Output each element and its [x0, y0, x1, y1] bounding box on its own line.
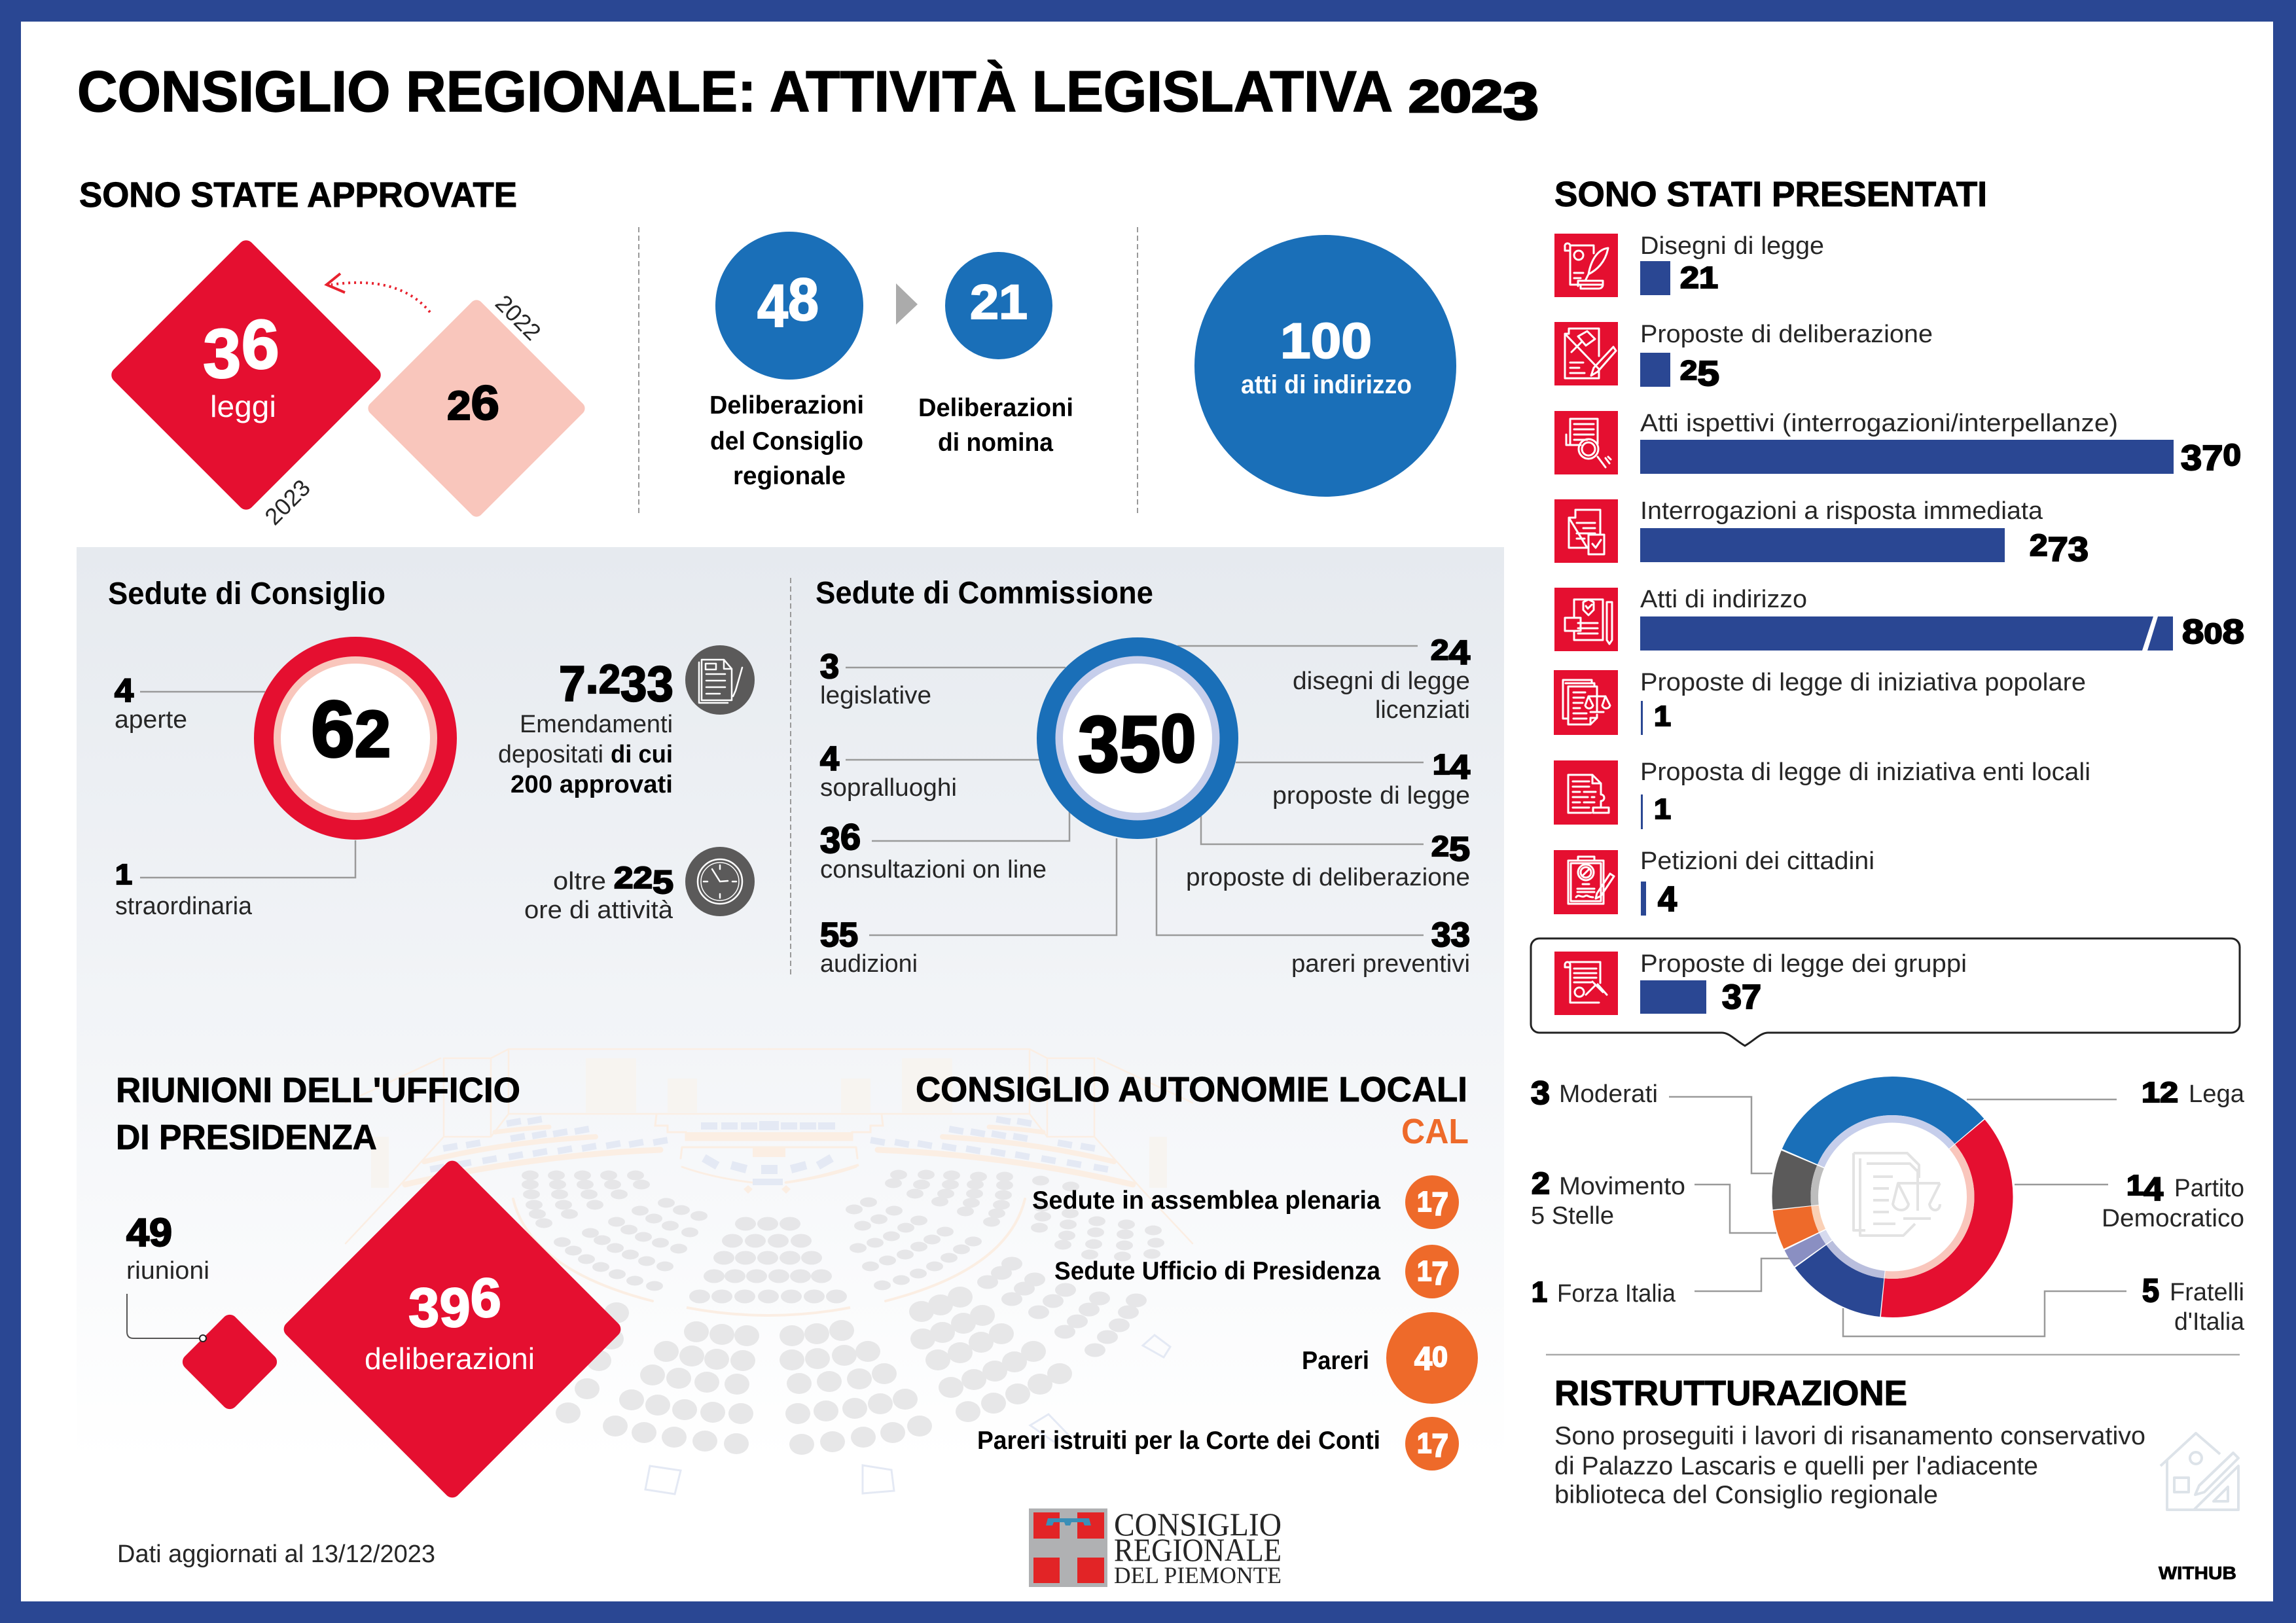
donut chart: proposte dei gruppi [1531, 1054, 2245, 1340]
stat: 4 sopralluoghi: 4 [820, 740, 839, 778]
year label 2023: 2023 [259, 474, 315, 530]
label: moderati: 3 [1531, 1075, 1550, 1111]
icon: scroll with quill [1554, 234, 1618, 297]
stat: 3 legislative: legislative [820, 682, 931, 709]
row: proposte di deliberazione: Proposte di deliberazione [1640, 321, 1933, 348]
row: atti ispettivi: Atti ispettivi (interrogazioni/interpellanze) [1640, 410, 2118, 437]
heading: RIUNIONI DELL'UFFICIO [116, 1071, 520, 1110]
diamond: 396 deliberazioni: deliberazioni [365, 1342, 535, 1376]
divider center [790, 578, 791, 977]
label: partito democratico: Democratico [2102, 1205, 2244, 1232]
panel: sedute di consiglio [108, 577, 755, 924]
label: partito democratico [2102, 1169, 2244, 1232]
stat: 36 consultazioni: consultazioni on line [820, 856, 1047, 883]
stat: 7233 emendamenti: 200 approvati [511, 771, 673, 798]
diamond: leggi 2022 [365, 297, 588, 520]
footnote: Dati aggiornati al 13/12/2023 [117, 1541, 435, 1568]
stat: oltre 225 ore: ore di attività [524, 897, 673, 924]
row: sedute ufficio di presidenza: 7 [1431, 1255, 1448, 1292]
logo: consiglio regionale del piemonte: DEL PIEMONTE [1114, 1562, 1282, 1588]
stat: 55 audizioni [820, 916, 918, 978]
ring: 62 sedute: 62 [311, 685, 391, 774]
title: 3 [1503, 72, 1539, 130]
stat: 33 pareri preventivi: 33 [1431, 916, 1470, 954]
circle: 48 deliberazioni del consiglio: Deliberazioni [709, 391, 864, 419]
icon: document with magnifier [1554, 411, 1618, 474]
diamond: leggi 2023: 3 [203, 314, 241, 393]
label: fratelli d'italia: 5 [2142, 1272, 2159, 1309]
label: movimento 5 stelle: 5 Stelle [1531, 1202, 1614, 1230]
circle: 21 deliberazioni di nomina: Deliberazioni [918, 394, 1073, 422]
stat: oltre 225 ore [524, 861, 673, 924]
label: movimento 5 stelle [1531, 1166, 1685, 1230]
label: partito democratico: 1 [2126, 1169, 2144, 1202]
stat: 14 proposte di legge: 4 [1450, 749, 1470, 787]
stat: 24 disegni: licenziati [1375, 696, 1470, 724]
stat: 3 legislative: 3 [820, 648, 839, 686]
diamond: leggi 2023: leggi [210, 389, 276, 423]
title: 202 [1408, 71, 1485, 122]
stat: oltre 225 ore: 22 [614, 861, 653, 895]
credit: withub: WITHUB [2159, 1563, 2236, 1583]
circle: 21 deliberazioni di nomina [918, 252, 1073, 457]
stat: 3 legislative [820, 648, 931, 709]
row: proposta enti locali: 1 [1654, 793, 1671, 825]
label: forza italia: 1 [1532, 1276, 1547, 1308]
row: pareri corte dei conti [977, 1417, 1459, 1471]
logo: consiglio regionale del piemonte: REGIONALE [1114, 1531, 1282, 1568]
label: lega: 12 [2142, 1077, 2178, 1109]
label: moderati: Moderati [1559, 1080, 1658, 1108]
ring: 350 sedute [1037, 637, 1238, 839]
icon: document with gavel and pen [1554, 322, 1618, 385]
row: petizioni: 4 [1658, 880, 1677, 919]
heading: sono state approvate: SONO STATE APPROVATE [79, 175, 517, 215]
diamond: leggi 2023 [108, 237, 384, 513]
row: proposta enti locali [1554, 758, 2090, 829]
row: sedute ufficio di presidenza: Sedute Ufficio di Presidenza [1054, 1257, 1380, 1285]
stat: 49 riunioni: 49 [126, 1211, 172, 1255]
row: pareri [1302, 1312, 1478, 1404]
label: fratelli d'italia: Fratelli [2170, 1279, 2244, 1306]
stat: 24 disegni: disegni di legge [1293, 668, 1470, 695]
arrow: grey triangle [896, 283, 918, 325]
diamond: 396 deliberazioni [281, 1158, 624, 1501]
title: CONSIGLIO REGIONALE: ATTIVITÀ LEGISLATIVA [77, 59, 1393, 124]
stat: 36 consultazioni: 3 [820, 819, 840, 861]
ring: 62 sedute [254, 637, 457, 840]
stat: 24 disegni [1293, 634, 1470, 724]
body text: di Palazzo Lascaris e quelli per l'adiacente [1554, 1452, 2038, 1480]
stat: oltre 225 ore: oltre [553, 868, 606, 895]
icon: clipboard with pen [1554, 850, 1618, 914]
divider left [639, 227, 1138, 514]
stat: 49 riunioni: riunioni [126, 1257, 209, 1285]
stat: 25 proposte di deliberazione [1186, 830, 1470, 891]
label: movimento 5 stelle: Movimento [1559, 1173, 1685, 1200]
stat: 14 proposte di legge [1272, 749, 1470, 810]
stat: 7233 emendamenti: 7 [559, 656, 586, 712]
icon: scroll with gavel [1554, 952, 1618, 1015]
row: pareri: 0 [1432, 1341, 1448, 1373]
stat: 7233 emendamenti [498, 649, 673, 798]
logo: consiglio regionale del piemonte: CONSIGLIO [1114, 1506, 1282, 1543]
stat: 25 proposte di deliberazione: 5 [1449, 830, 1470, 868]
stat: 7233 emendamenti: 2 [599, 657, 620, 702]
icon: document with stamp [1554, 760, 1618, 825]
label: fratelli d'italia [2142, 1272, 2245, 1336]
icon: clock in grey circle [685, 847, 755, 916]
arrow: dotted comparison [327, 274, 430, 312]
connector lines [1669, 1097, 2126, 1336]
stat: 25 proposte di deliberazione: 2 [1431, 830, 1449, 863]
stat: 4 sopralluoghi: sopralluoghi [820, 774, 957, 802]
diamond: 396 deliberazioni: 6 [471, 1267, 501, 1329]
circle: 48 deliberazioni del consiglio [709, 232, 864, 490]
callout: proposte di legge dei gruppi [1531, 938, 2240, 1046]
circle: 48 deliberazioni del consiglio: del Consiglio [710, 427, 863, 455]
diamond: small 49 [179, 1311, 280, 1412]
stat: 25 proposte di deliberazione: proposte di deliberazione [1186, 864, 1470, 891]
icon: document in grey circle [685, 645, 755, 715]
stat: 7233 emendamenti: 33 [620, 656, 673, 712]
row: interrogazioni: 73 [2048, 531, 2089, 569]
stat: 7233 emendamenti: depositati [498, 741, 603, 768]
stat: 1 straordinaria: straordinaria [115, 893, 253, 920]
row: proposte iniziativa popolare: 1 [1654, 700, 1671, 732]
row: petizioni [1554, 847, 1874, 919]
stat: 49 riunioni [126, 1211, 209, 1285]
stat: 4 aperte: aperte [115, 706, 187, 734]
row: proposta enti locali: Proposta di legge di iniziativa enti locali [1640, 758, 2090, 786]
stat: 4 aperte [115, 672, 187, 734]
stat: 55 audizioni: audizioni [820, 950, 918, 978]
stat: 1 straordinaria [115, 859, 253, 920]
row: pareri corte dei conti: Pareri istruiti per la Corte dei Conti [977, 1427, 1380, 1455]
row: disegni di legge: 21 [1680, 260, 1718, 294]
panel: riunioni ufficio di presidenza [116, 1071, 624, 1501]
row: sedute in assemblea plenaria: Sedute in assemblea plenaria [1032, 1186, 1380, 1215]
heading [116, 1071, 520, 1157]
row: proposte di deliberazione [1554, 321, 1933, 393]
heading: Sedute di Commissione [816, 576, 1153, 611]
row: atti ispettivi [1554, 410, 2241, 478]
row: interrogazioni [1554, 497, 2089, 569]
label: partito democratico: Partito [2174, 1175, 2244, 1202]
stat: 36 consultazioni [820, 816, 1047, 883]
panel: ristrutturazione [1554, 1374, 2238, 1510]
inner ring segments [1782, 1087, 2003, 1307]
stat: 1 straordinaria: 1 [115, 859, 132, 891]
row: sedute in assemblea plenaria: 7 [1431, 1186, 1448, 1222]
row: interrogazioni: 2 [2030, 528, 2048, 562]
logo: consiglio regionale del piemonte [1029, 1506, 1282, 1588]
row: disegni di legge: Disegni di legge [1640, 232, 1824, 260]
connector lines [140, 692, 355, 878]
stat: 36 consultazioni: 6 [840, 816, 861, 857]
icon: house with ruler [2161, 1433, 2238, 1510]
stat: 24 disegni: 4 [1449, 634, 1470, 672]
icon: shield document [1554, 588, 1618, 651]
heading: SONO STATI PRESENTATI [1554, 175, 1987, 214]
row: proposte di deliberazione: 2 [1680, 355, 1697, 385]
panel: leggi approvate [108, 237, 588, 530]
heading: CAL [1401, 1112, 1469, 1151]
row: petizioni: Petizioni dei cittadini [1640, 847, 1874, 875]
label: lega: Lega [2189, 1080, 2245, 1108]
circle: 100 atti di indirizzo: 100 [1280, 313, 1372, 369]
panel: sono stati presentati [1531, 175, 2244, 1046]
row: pareri corte dei conti: 1 [1417, 1427, 1431, 1459]
row: atti ispettivi: 37 [2181, 438, 2223, 478]
row: atti ispettivi: 0 [2223, 438, 2241, 472]
stat: 4 sopralluoghi [820, 740, 957, 802]
row: pareri: 4 [1414, 1340, 1432, 1377]
icon: documents with scales [1554, 670, 1618, 735]
year label 2022: 2022 [490, 289, 547, 346]
icon: documents with scales [1854, 1153, 1940, 1236]
label: lega [2142, 1077, 2245, 1109]
row: interrogazioni: Interrogazioni a risposta immediata [1640, 497, 2043, 525]
diamond: leggi 2023: 6 [241, 305, 279, 383]
stat: oltre 225 ore: 5 [653, 864, 673, 901]
callout: proposte di legge dei gruppi: 37 [1722, 978, 1761, 1016]
background: parliament hall illustration [346, 1049, 1193, 1494]
body text: Sono proseguiti i lavori di risanamento conservativo [1554, 1422, 2145, 1450]
diamond: leggi 2022: 26 [447, 376, 499, 430]
stat: 33 pareri preventivi: pareri preventivi [1291, 950, 1470, 978]
divider right [1546, 1354, 2240, 1355]
row: atti di indirizzo [1554, 586, 2244, 651]
stat: 4 aperte: 4 [115, 672, 134, 709]
row: proposte iniziativa popolare: Proposte di legge di iniziativa popolare [1640, 669, 2086, 696]
stat: 7233 emendamenti: di cui [611, 741, 673, 768]
heading [916, 1070, 1469, 1151]
body text: biblioteca del Consiglio regionale [1554, 1481, 1938, 1509]
row: sedute ufficio di presidenza: 1 [1417, 1255, 1431, 1287]
heading: DI PRESIDENZA [116, 1118, 377, 1157]
label: moderati [1531, 1075, 1658, 1111]
row: proposte di deliberazione: 5 [1697, 354, 1719, 393]
stat: 55 audizioni: 55 [820, 916, 858, 954]
label: forza italia: Forza Italia [1557, 1280, 1676, 1308]
row: proposte iniziativa popolare [1554, 669, 2086, 735]
row: disegni di legge [1554, 232, 1824, 297]
row: sedute in assemblea plenaria: 1 [1417, 1186, 1431, 1218]
diamond: 396 deliberazioni: 39 [408, 1277, 471, 1338]
icon: document with check [1554, 499, 1618, 563]
label: movimento 5 stelle: 2 [1532, 1166, 1550, 1200]
stat: 24 disegni: 2 [1431, 634, 1449, 666]
panel: sedute background [77, 547, 1504, 1459]
circle: 100 atti di indirizzo [1194, 235, 1456, 497]
outer ring segments [1750, 1054, 2035, 1340]
panel: sedute di commissione [816, 576, 1470, 978]
connector lines [846, 646, 1424, 935]
stat: 7233 emendamenti: Emendamenti [520, 711, 673, 738]
row: pareri: Pareri [1302, 1347, 1369, 1375]
row: pareri corte dei conti: 7 [1431, 1427, 1448, 1464]
row: atti di indirizzo: 808 [2182, 613, 2244, 651]
body text [1554, 1422, 2145, 1509]
label: partito democratico: 4 [2144, 1171, 2163, 1207]
row: sedute ufficio di presidenza [1054, 1245, 1459, 1298]
circle: 21 deliberazioni di nomina: di nomina [938, 429, 1053, 457]
connector with dot [127, 1294, 206, 1342]
callout: proposte di legge dei gruppi: Proposte di legge dei gruppi [1640, 950, 1967, 978]
heading: CONSIGLIO AUTONOMIE LOCALI [916, 1070, 1467, 1109]
heading: RISTRUTTURAZIONE [1554, 1374, 1907, 1413]
label: fratelli d'italia: d'Italia [2174, 1308, 2245, 1336]
stat: 14 proposte di legge: proposte di legge [1272, 782, 1470, 810]
row: sedute in assemblea plenaria [1032, 1175, 1459, 1229]
panel: consiglio autonomie locali [916, 1070, 1478, 1471]
circle: 48 deliberazioni del consiglio: 4 [757, 273, 788, 340]
circle: 48 deliberazioni del consiglio: 8 [788, 266, 819, 333]
stat: 7233 emendamenti: . [586, 649, 599, 704]
ring: 350 sedute: 0 [1160, 701, 1196, 777]
heading: Sedute di Consiglio [108, 577, 386, 611]
circle: 48 deliberazioni del consiglio: regionale [733, 462, 846, 490]
circle: 21 deliberazioni di nomina: 21 [970, 275, 1028, 329]
ring: 350 sedute: 35 [1078, 700, 1160, 789]
stat: 14 proposte di legge: 1 [1433, 749, 1450, 781]
row: atti di indirizzo: Atti di indirizzo [1640, 586, 1807, 613]
stat: 33 pareri preventivi [1291, 916, 1470, 978]
circle: 100 atti di indirizzo: atti di indirizzo [1241, 370, 1412, 399]
label: forza italia [1532, 1276, 1676, 1308]
